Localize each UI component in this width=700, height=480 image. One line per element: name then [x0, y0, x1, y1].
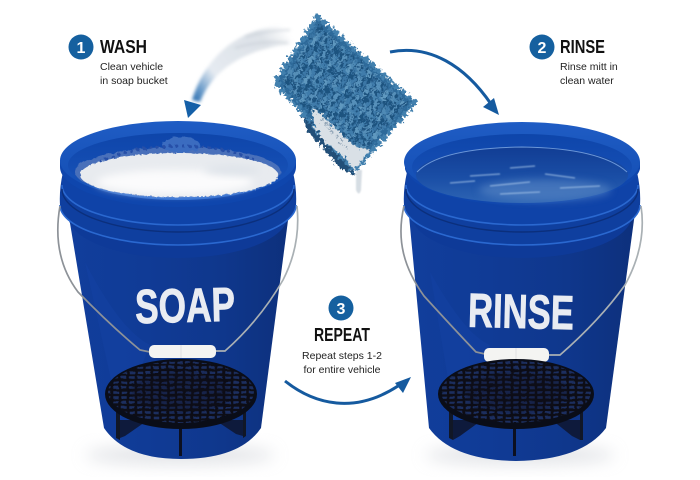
foam on mitt: [312, 110, 370, 170]
chenille wash mitt: [275, 17, 415, 176]
wash heading: WASH: [100, 37, 147, 57]
arrow: repeat: [285, 377, 411, 403]
repeat description: Repeat steps 1-2: [302, 350, 382, 362]
repeat heading: REPEAT: [314, 325, 370, 345]
soap label: SOAP: [134, 279, 236, 334]
bucket handle: [58, 206, 298, 358]
step 3: repeat: [302, 296, 382, 376]
wash description: Clean vehicle: [100, 61, 163, 73]
clean water: [416, 147, 628, 203]
step 2: rinse: [530, 34, 618, 87]
grit guard: [438, 359, 594, 456]
step 1: wash: [68, 34, 168, 87]
bucket handle: [401, 206, 642, 362]
badge 3: 3: [337, 301, 346, 318]
rinse heading: RINSE: [560, 37, 605, 57]
arrow: into soap bucket: [184, 26, 298, 118]
arrow: to rinse bucket: [390, 50, 499, 115]
badge 2: 2: [538, 40, 547, 57]
bucket rim: [404, 122, 640, 205]
rinse description: clean water: [560, 75, 614, 87]
grit guard: [105, 359, 257, 456]
rinse bucket: [401, 122, 642, 465]
infographic: two bucket wash method: [56, 14, 644, 469]
badge 1: 1: [77, 40, 86, 57]
bucket rim: [60, 121, 296, 207]
water drip: [356, 170, 362, 194]
repeat description: for entire vehicle: [303, 364, 381, 376]
rinse label: RINSE: [467, 285, 575, 340]
soap bucket: [58, 121, 298, 465]
wash description: in soap bucket: [100, 75, 168, 87]
rinse description: Rinse mitt in: [560, 61, 618, 73]
soap foam: [75, 137, 281, 197]
